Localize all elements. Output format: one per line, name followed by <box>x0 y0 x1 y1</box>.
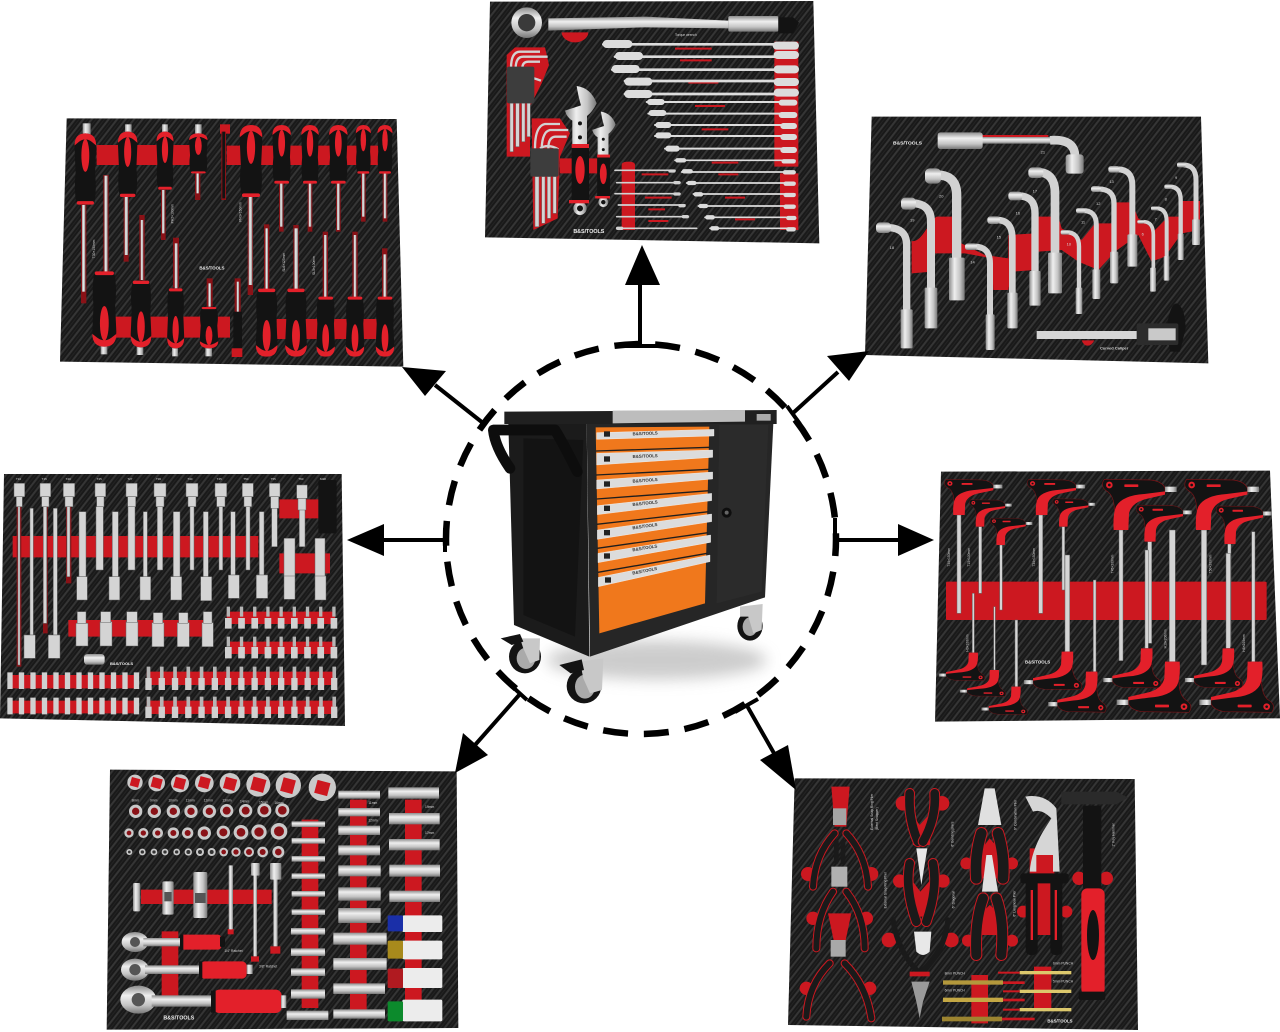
logo and labels: 12mm <box>204 798 213 802</box>
logo and size labels: B&S/TOOLS <box>1025 659 1050 664</box>
size numbers: 21 <box>1041 149 1046 154</box>
small bit rows <box>7 612 337 712</box>
size numbers: 9 <box>1175 175 1178 180</box>
brass punches <box>942 971 1071 1021</box>
bit labels: T15 <box>42 477 47 481</box>
long bit sockets, top row <box>14 480 337 667</box>
deep sockets, second column <box>333 791 387 1019</box>
logo and size labels: SL5×100mm <box>312 256 316 275</box>
bit labels: T30 <box>156 477 161 481</box>
logo: B&S/TOOLS <box>893 140 923 146</box>
logo and labels: (Bent Snapper) <box>875 807 879 830</box>
logo and labels: 6" Bending pliers <box>951 821 955 847</box>
deep sockets, first column <box>287 821 328 1020</box>
arrow: up to wrench tray <box>616 245 664 348</box>
logo and size labels: H3×100mm <box>965 634 969 652</box>
bit labels: T20 <box>66 477 71 481</box>
size numbers: 7 <box>1155 216 1158 221</box>
arrow: right to T-handle tray <box>835 518 934 556</box>
casters <box>501 604 763 703</box>
logo and labels: 9mm <box>150 798 158 802</box>
logo and labels: External Snap Ring Plier <box>883 871 887 908</box>
logo and labels: 6" Combination Plier <box>1013 799 1017 830</box>
drawer logo badges <box>604 431 611 583</box>
logo and size labels: T15×100mm <box>967 548 971 567</box>
socket 21 <box>938 132 1084 174</box>
bit labels: T25 <box>97 477 102 481</box>
combination wrenches <box>603 44 795 229</box>
size numbers: 20 <box>939 193 944 198</box>
drawer brand labels: B&S/TOOLS <box>633 430 658 436</box>
logo and labels: 14mm <box>240 800 249 804</box>
logo and labels: External Snap Ring Plier <box>870 793 874 830</box>
drawer brand labels: B&S/TOOLS <box>632 522 658 530</box>
logo and labels <box>132 798 434 1022</box>
logo and size labels: B&S/TOOLS <box>199 265 225 270</box>
socket rows <box>124 773 336 858</box>
logo and labels <box>870 793 1116 1024</box>
small L sockets <box>1061 162 1200 314</box>
combination and long nose pliers <box>976 788 1003 955</box>
floor shadow <box>547 641 767 679</box>
logo and size labels: T30×150mm <box>92 239 96 258</box>
top row screwdrivers <box>75 123 392 303</box>
size numbers: 19 <box>910 218 915 223</box>
logo and size labels: PH2×100mm <box>170 204 174 223</box>
size numbers: 17 <box>1033 188 1038 193</box>
arrow: up-right to L-socket tray <box>787 351 869 424</box>
T-handle keys, top row <box>945 479 1272 665</box>
drawer brand labels: B&S/TOOLS <box>632 543 658 552</box>
logo and labels: B&S/TOOLS <box>163 1016 195 1022</box>
cabinet door and lock <box>717 425 768 603</box>
logo and size labels <box>92 202 316 275</box>
logo and labels: 1" Key Hammer <box>1112 822 1116 847</box>
drawer brand labels <box>632 430 658 576</box>
drawer gaps <box>596 447 710 572</box>
logo and labels: 6mm PUNCH <box>1053 961 1074 965</box>
ratchets <box>120 932 286 1014</box>
logo and labels: 11mm <box>368 801 378 805</box>
logo and size labels: T45×200mm <box>1110 554 1114 573</box>
bit labels: T60 <box>298 477 304 481</box>
logo and labels: 19mm <box>425 805 434 809</box>
hex key sets <box>507 47 570 230</box>
hammer <box>1061 792 1128 1000</box>
size numbers: 18 <box>890 245 895 250</box>
logo and labels: B&S/TOOLS <box>1047 1019 1073 1024</box>
arrow: down-right to pliers tray <box>735 699 796 790</box>
logo and size labels: PH3×150mm <box>239 202 243 222</box>
drawer brand labels: B&S/TOOLS <box>633 453 658 459</box>
logo and labels: 17mm <box>425 831 434 835</box>
adapter and logo: B&S/TOOLS <box>110 661 134 666</box>
impact sockets with colour rings <box>388 915 442 1021</box>
universal joints <box>133 872 207 918</box>
logo and labels: 12mm <box>368 818 378 822</box>
arrow: left to bit tray <box>347 524 445 556</box>
bit labels: T40 <box>187 477 193 481</box>
bit labels: T27 <box>127 477 133 481</box>
red foam strips <box>141 800 422 1013</box>
panel: socket and ratchet tray <box>107 770 458 1030</box>
logo and labels: 8mm <box>132 798 139 802</box>
dashed circle <box>446 344 836 734</box>
logo and size labels <box>947 548 1246 664</box>
red foam strip <box>946 582 1267 620</box>
logo and size labels: H8×200mm <box>1242 634 1246 652</box>
torque wrench: Torque wrench <box>675 33 697 37</box>
bit labels: M18 <box>320 477 326 481</box>
logo and labels: 5mm PUNCH <box>1053 979 1074 983</box>
size numbers: 10 <box>1067 242 1072 247</box>
short wrenches <box>615 170 697 228</box>
bit labels: T10 <box>16 477 21 481</box>
short sockets, middle row <box>76 612 213 647</box>
socket bores <box>127 776 330 855</box>
T-handle keys, bottom row <box>939 530 1274 715</box>
size numbers: 6 <box>1142 232 1145 237</box>
panel: screwdriver tray <box>60 118 403 367</box>
logo and labels: 1/4" Ratchet <box>224 949 243 953</box>
bit labels <box>16 477 326 481</box>
red wave foam strip <box>912 201 1200 290</box>
logo and labels: 8mm PUNCH <box>945 971 965 975</box>
logo and size labels: T30×150mm <box>1032 548 1036 567</box>
logo and labels: 16mm <box>274 801 284 805</box>
panel: L-socket wrench tray <box>865 117 1208 363</box>
side handle <box>493 430 577 472</box>
logo and labels: 3/8" Ratchet <box>259 964 277 968</box>
long bit sockets, lower row <box>24 508 326 658</box>
logo and size labels: SL6×125mm <box>282 252 286 272</box>
red foam cut-outs <box>560 32 798 230</box>
caliper: Curved Caliper <box>1100 345 1129 350</box>
bottom row screwdrivers <box>92 175 394 357</box>
size numbers: 16 <box>1016 210 1021 215</box>
bit labels: T55 <box>271 477 276 481</box>
red foam strips <box>8 499 335 714</box>
panel: bit socket tray <box>0 474 345 726</box>
central trolley <box>493 410 777 703</box>
size numbers: 11 <box>1081 220 1086 225</box>
bent and diagonal pliers <box>893 793 948 1018</box>
arrow: up-left to screwdriver tray <box>402 367 483 423</box>
panel: T-handle key tray <box>935 471 1280 722</box>
panel: wrench tray <box>485 1 819 243</box>
drawer handles <box>597 429 714 587</box>
front body <box>587 423 773 657</box>
side panel <box>508 423 589 657</box>
bit labels: T45 <box>217 477 222 481</box>
deep sockets, third column <box>388 787 440 902</box>
drawer brand labels: B&S/TOOLS <box>632 499 658 507</box>
snap ring pliers <box>806 808 871 1018</box>
red foam strips <box>97 145 380 339</box>
red foam cut-outs <box>800 787 1113 1023</box>
drawer brand labels: B&S/TOOLS <box>632 566 658 576</box>
size numbers: 14 <box>970 259 976 264</box>
logo: B&S/TOOLS <box>573 229 605 235</box>
logo and labels: 11mm <box>186 798 195 802</box>
panel: pliers and hammer tray <box>788 778 1138 1030</box>
bit labels: T50 <box>243 477 249 481</box>
adjustable wrenches <box>565 86 616 215</box>
logo and labels: 6" Diagonal <box>952 891 956 908</box>
logo and labels: 10mm <box>168 798 178 802</box>
logo and labels: 13mm <box>222 798 232 802</box>
adapter and logo <box>84 654 134 666</box>
logo and labels: 15mm <box>259 800 268 804</box>
extension bars <box>228 863 281 962</box>
logo and size labels: T40×150mm <box>947 548 951 567</box>
size numbers: 8 <box>1165 197 1168 202</box>
logo and size labels: H10×200mm <box>1164 629 1168 648</box>
size numbers: 12 <box>1096 201 1101 206</box>
top plate <box>504 410 777 424</box>
arrow: down-left to socket tray <box>455 680 527 773</box>
caliper <box>1037 303 1186 352</box>
orange drawers <box>596 427 709 633</box>
drawer brand labels: B&S/TOOLS <box>632 477 658 484</box>
logo and labels: 6mm PUNCH <box>945 989 965 993</box>
size numbers <box>890 149 1178 264</box>
logo and labels: 6" Longnose Plier <box>1012 890 1016 917</box>
logo and size labels: T50×200mm <box>1209 554 1213 573</box>
size numbers: 15 <box>997 234 1002 239</box>
large L sockets <box>876 167 1062 350</box>
size numbers: 13 <box>1109 179 1115 184</box>
water pump pliers <box>1020 796 1069 955</box>
torque wrench <box>511 7 799 38</box>
